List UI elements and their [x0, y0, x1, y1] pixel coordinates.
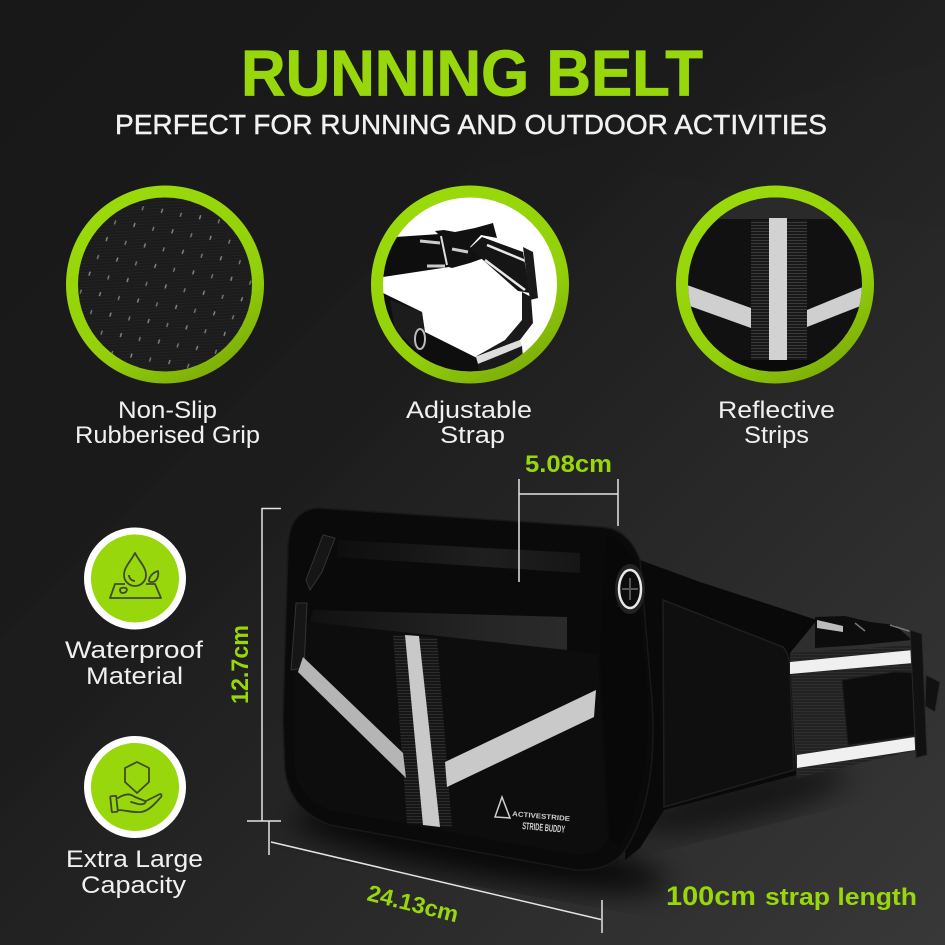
label: Material	[86, 663, 183, 690]
label: Adjustable	[406, 397, 532, 424]
feature: adjustable strap	[371, 186, 569, 449]
feature: non-slip rubberised grip	[66, 186, 264, 449]
title: RUNNING BELT	[241, 36, 703, 110]
label: Rubberised Grip	[75, 422, 260, 449]
icon: reflective strips photo	[676, 186, 874, 384]
label	[406, 397, 532, 449]
feature: extra large capacity	[66, 736, 203, 899]
height dimension 12.7cm	[227, 508, 281, 855]
bag front face	[293, 618, 608, 855]
brand logo: ACTIVESTRIDE	[512, 811, 571, 823]
depth value: 5.08cm	[525, 451, 612, 478]
width dimension 24.13cm	[271, 842, 602, 933]
belt rear buckle	[815, 616, 912, 648]
width value: 24.13cm	[365, 880, 461, 927]
strap length callout: 100cm	[666, 881, 756, 911]
icon: rubberised grip texture	[66, 186, 264, 384]
feature: reflective strips	[676, 186, 874, 449]
bag shadow	[288, 791, 672, 909]
brand logo: STRIDE BUDDY	[522, 821, 566, 836]
belt rear pad	[625, 560, 817, 860]
upper zipper	[337, 540, 580, 573]
bag body	[283, 508, 653, 870]
depth dimension 5.08cm	[519, 451, 618, 582]
label: Extra Large	[66, 846, 203, 873]
label	[75, 397, 260, 449]
label	[65, 637, 203, 690]
strap length callout	[666, 881, 917, 911]
lower zipper	[310, 610, 567, 650]
label: Non-Slip	[118, 397, 217, 424]
label: Waterproof	[65, 637, 203, 664]
brand logo	[495, 797, 571, 836]
label: Strap	[440, 422, 505, 449]
running belt product drawing	[283, 508, 940, 909]
bag side panel	[600, 535, 648, 845]
subtitle: PERFECT FOR RUNNING AND OUTDOOR ACTIVITIES	[115, 109, 827, 140]
feature: waterproof material	[65, 528, 203, 690]
icon: belt with buckle photo	[371, 186, 569, 384]
icon: water drop on surface	[84, 528, 186, 630]
strap elastic loop	[842, 672, 918, 745]
vertical webbing	[393, 635, 452, 827]
zipper pulls	[291, 535, 335, 670]
strap reflective strips	[790, 650, 915, 768]
label: Strips	[744, 422, 809, 449]
icon: shield over hand	[84, 736, 186, 838]
label: Reflective	[718, 397, 835, 424]
belt rear shadow	[628, 752, 852, 848]
left reflective strip	[298, 657, 406, 778]
height value: 12.7cm	[227, 625, 254, 704]
label	[718, 397, 835, 449]
label: Capacity	[81, 872, 186, 899]
strap end clip	[910, 630, 940, 758]
strap webbing	[790, 645, 917, 778]
strap length callout: strap length	[765, 884, 917, 911]
strap mount ring	[615, 564, 645, 614]
label	[66, 846, 203, 899]
right reflective strip	[445, 690, 596, 787]
vertical reflective strip	[405, 635, 440, 827]
